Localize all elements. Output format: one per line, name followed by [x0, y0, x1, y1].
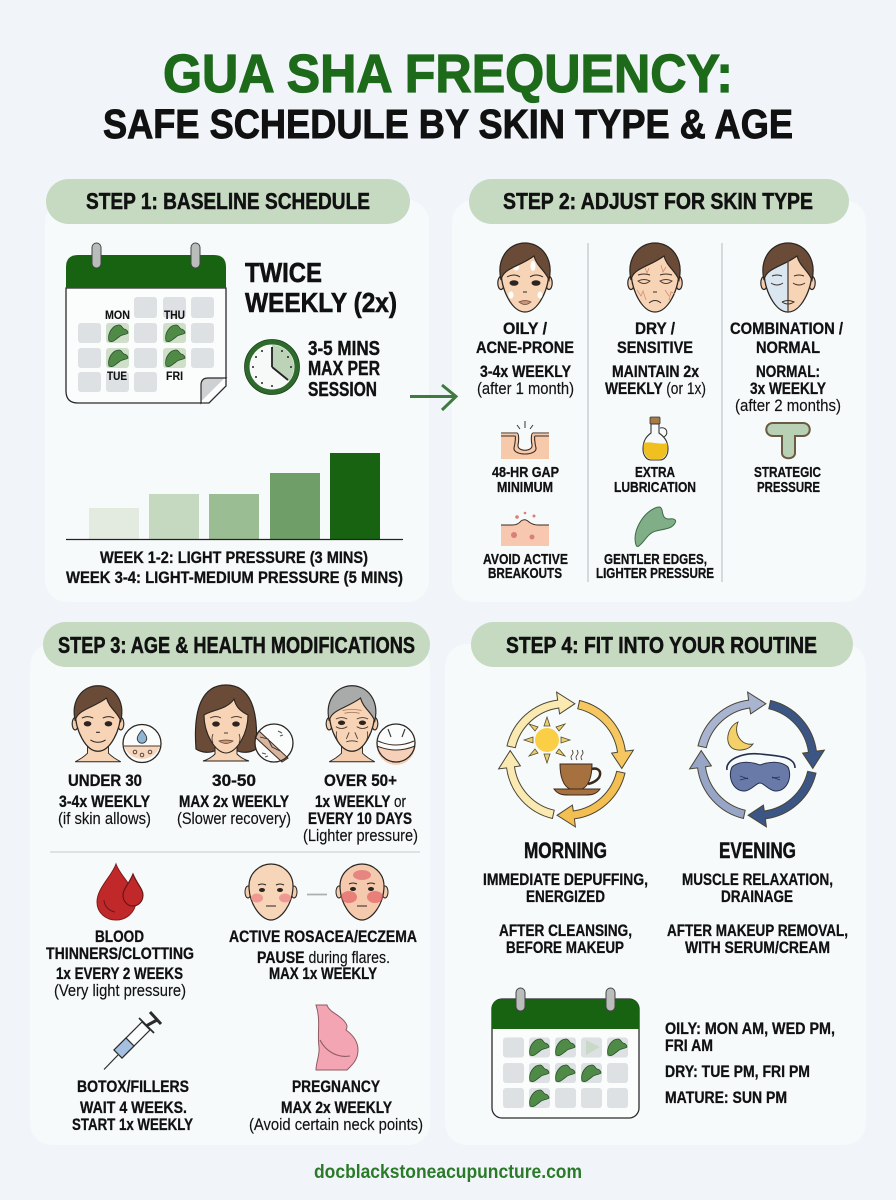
text: strategic pressure — [754, 464, 821, 496]
heading: step 3 — [43, 622, 430, 667]
text: rosacea and eczema: PAUSE during flares. — [257, 948, 390, 967]
text: under 30: 3-4x WEEKLY — [59, 792, 151, 811]
icon: sun — [524, 717, 570, 763]
icon: middle age face — [195, 685, 257, 761]
icon: hydrated skin badge — [123, 724, 161, 762]
icon: calendar with Monday Tuesday Thursday Friday marked: FRI — [166, 371, 183, 383]
text: 30-50 — [177, 771, 291, 828]
text: pregnancy: PREGNANCY — [292, 1077, 381, 1096]
text: dry heading: SENSITIVE — [617, 338, 693, 357]
text: under 30 — [58, 771, 151, 828]
group: under 30 — [58, 686, 161, 828]
panel: step 3 age and health — [30, 622, 430, 1145]
text: pregnancy — [249, 1077, 423, 1134]
text: weekly pressure notes: WEEK 3-4: LIGHT-MEDIUM PRESSURE (5 MINS) — [66, 568, 403, 587]
group: over 50 — [303, 686, 418, 845]
text: rosacea and eczema: ACTIVE ROSACEA/ECZEMA — [229, 927, 417, 946]
icon: calendar with Monday Tuesday Thursday Friday marked: TUE — [107, 371, 127, 383]
text: evening: WITH SERUM/CREAM — [685, 938, 830, 957]
text: morning: AFTER CLEANSING, — [499, 921, 632, 940]
text: 48 hour gap: MINIMUM — [497, 479, 553, 496]
heading: step 4 — [471, 622, 853, 667]
text: oily heading: OILY / — [503, 319, 547, 338]
text: blood thinners: (Very light pressure) — [54, 981, 186, 1000]
text: rosacea and eczema: MAX 1x WEEKLY — [269, 964, 378, 983]
icon: pregnant torso — [316, 1005, 358, 1070]
column: combination and normal — [730, 243, 843, 496]
group: evening — [667, 692, 848, 957]
icon: evening cycle arrows — [690, 692, 824, 827]
icon: breakouts — [501, 512, 549, 546]
icon: thinning skin badge — [377, 724, 415, 765]
text: blood thinners: BLOOD — [95, 927, 144, 946]
heading: step 4: STEP 4: FIT INTO YOUR ROUTINE — [506, 632, 817, 658]
title: SAFE SCHEDULE BY SKIN TYPE & AGE — [103, 101, 793, 147]
icon: morning cycle arrows — [499, 692, 633, 827]
icon: calendar with Monday Tuesday Thursday Friday marked: MON — [105, 310, 130, 322]
text: sample weekly schedule: MATURE: SUN PM — [665, 1088, 787, 1107]
text: over 50 — [303, 771, 418, 845]
text: blood thinners: THINNERS/CLOTTING — [46, 944, 194, 963]
text: sample weekly schedule: FRI AM — [665, 1036, 713, 1055]
heading: step 1 — [46, 179, 410, 224]
text: dry heading: DRY / — [635, 319, 675, 338]
footer: website: docblackstoneacupuncture.com — [314, 1162, 582, 1183]
text: combination heading: (after 2 months) — [735, 396, 841, 415]
text: over 50: 1x WEEKLY or — [315, 792, 406, 811]
panel: step 1 baseline schedule — [45, 179, 429, 602]
text: session length: 3-5 MINS — [308, 338, 380, 360]
text: gentler edges: GENTLER EDGES, — [604, 551, 707, 568]
icon: sleep mask — [727, 754, 795, 791]
text: session length — [308, 338, 380, 401]
text: twice weekly: WEEKLY (2x) — [245, 287, 397, 318]
text: avoid active breakouts: AVOID ACTIVE — [483, 551, 568, 568]
text: rosacea and eczema — [229, 927, 417, 983]
group: blood thinners — [46, 864, 194, 1000]
text: sample weekly schedule: OILY: MON AM, WED PM, — [665, 1019, 835, 1038]
text: combination heading — [730, 319, 843, 415]
icon: oily face — [498, 243, 552, 312]
text: session length: SESSION — [308, 379, 377, 401]
text: evening: EVENING — [719, 838, 796, 863]
text: combination heading: COMBINATION / — [730, 319, 843, 338]
text: over 50: OVER 50+ — [324, 771, 397, 790]
text: 48 hour gap: 48-HR GAP — [492, 464, 559, 481]
text: avoid active breakouts — [483, 551, 568, 582]
column: oily and acne-prone — [476, 243, 574, 582]
heading: step 1: STEP 1: BASELINE SCHEDULE — [86, 188, 370, 214]
text: gentler edges: LIGHTER PRESSURE — [596, 565, 714, 582]
group: 30-50 — [177, 685, 293, 828]
title: GUA SHA FREQUENCY: — [163, 44, 733, 104]
icon: mild rosacea face — [245, 864, 297, 920]
heading: step 2 — [469, 179, 849, 224]
text: dry heading — [605, 319, 706, 398]
text: 48 hour gap — [492, 464, 559, 496]
text: weekly pressure notes: WEEK 1-2: LIGHT PRESSURE (3 MINS) — [100, 548, 368, 567]
text: twice weekly — [245, 257, 397, 318]
text: twice weekly: TWICE — [245, 257, 322, 288]
text: over 50: EVERY 10 DAYS — [308, 809, 412, 828]
text: morning — [483, 838, 648, 957]
column: dry and sensitive — [596, 243, 714, 582]
icon: T-shaped tool — [766, 423, 810, 458]
text: dry heading: WEEKLY (or 1x) — [605, 379, 706, 398]
text: sample weekly schedule: DRY: TUE PM, FRI PM — [665, 1062, 810, 1081]
panel: step 2 skin type — [452, 179, 866, 602]
icon: collagen fibre badge — [255, 724, 293, 762]
icon: older face — [326, 686, 378, 762]
text: botox and fillers: START 1x WEEKLY — [72, 1115, 194, 1134]
icon: blood drops — [97, 864, 143, 920]
icon: oil bottle — [643, 417, 668, 460]
heading: step 2: STEP 2: ADJUST FOR SKIN TYPE — [503, 188, 813, 214]
text: under 30: UNDER 30 — [68, 771, 142, 790]
text: oily heading: ACNE-PRONE — [476, 338, 574, 357]
icon: severe rosacea face — [336, 864, 388, 920]
text: morning: MORNING — [524, 838, 607, 863]
text: session length: MAX PER — [308, 358, 380, 380]
text: over 50: (Lighter pressure) — [303, 826, 418, 845]
text: strategic pressure: STRATEGIC — [754, 464, 821, 481]
text: under 30: (if skin allows) — [58, 809, 151, 828]
text: evening: DRAINAGE — [721, 887, 793, 906]
text: pregnancy: (Avoid certain neck points) — [249, 1115, 423, 1134]
text: oily heading — [476, 319, 574, 398]
text: blood thinners: 1x EVERY 2 WEEKS — [56, 964, 183, 983]
title — [103, 44, 793, 147]
icon: young face — [72, 686, 124, 762]
text: pregnancy: MAX 2x WEEKLY — [281, 1098, 393, 1117]
text: botox and fillers: WAIT 4 WEEKS. — [80, 1098, 187, 1117]
icon: dry face — [628, 243, 682, 312]
panel: step 4 routine — [445, 622, 866, 1145]
text: extra lubrication: EXTRA — [635, 464, 675, 481]
text: morning: IMMEDIATE DEPUFFING, — [483, 870, 648, 889]
icon: coffee cup — [554, 750, 600, 795]
group: morning — [483, 692, 648, 957]
text: dry heading: MAINTAIN 2x — [612, 362, 699, 381]
text: evening: AFTER MAKEUP REMOVAL, — [667, 921, 848, 940]
text: sample weekly schedule — [665, 1019, 835, 1107]
text: extra lubrication: LUBRICATION — [614, 479, 696, 496]
text: combination heading: NORMAL: — [756, 362, 820, 381]
icon: skin pore — [501, 421, 549, 459]
text: 30-50: 30-50 — [212, 771, 256, 790]
icon: combination face — [761, 243, 815, 312]
icon: syringe — [104, 1012, 161, 1070]
text: combination heading: NORMAL — [756, 338, 820, 357]
group: rosacea and eczema — [229, 864, 417, 983]
text: strategic pressure: PRESSURE — [757, 479, 820, 496]
heading: step 3: STEP 3: AGE & HEALTH MODIFICATIONS — [58, 632, 415, 658]
group: pregnancy — [249, 1005, 423, 1134]
text: morning: ENERGIZED — [526, 887, 605, 906]
text: 30-50: (Slower recovery) — [177, 809, 291, 828]
text: blood thinners — [46, 927, 194, 1000]
text: combination heading: 3x WEEKLY — [750, 379, 827, 398]
text: botox and fillers — [72, 1077, 194, 1134]
text: 30-50: MAX 2x WEEKLY — [179, 792, 290, 811]
text: evening — [667, 838, 848, 957]
text: botox and fillers: BOTOX/FILLERS — [77, 1077, 189, 1096]
icon: gua sha tool — [635, 507, 676, 546]
icon: calendar with Monday Tuesday Thursday Friday marked — [66, 243, 226, 403]
icon: weekly calendar — [492, 988, 639, 1118]
text: gentler edges — [596, 551, 714, 582]
text: morning: BEFORE MAKEUP — [506, 938, 624, 957]
text: oily heading: 3-4x WEEKLY — [480, 362, 572, 381]
text: weekly pressure notes — [66, 548, 403, 587]
text: extra lubrication — [614, 464, 696, 496]
icon: moon — [728, 722, 753, 750]
bar chart: pressure progression — [66, 453, 403, 540]
group: botox and fillers — [72, 1012, 194, 1134]
text: avoid active breakouts: BREAKOUTS — [488, 565, 562, 582]
text: evening: MUSCLE RELAXATION, — [682, 870, 833, 889]
arrow: step 1 to step 2 — [410, 385, 456, 410]
icon: clock — [244, 340, 300, 394]
text: oily heading: (after 1 month) — [477, 379, 574, 398]
icon: calendar with Monday Tuesday Thursday Friday marked: THU — [164, 310, 185, 322]
